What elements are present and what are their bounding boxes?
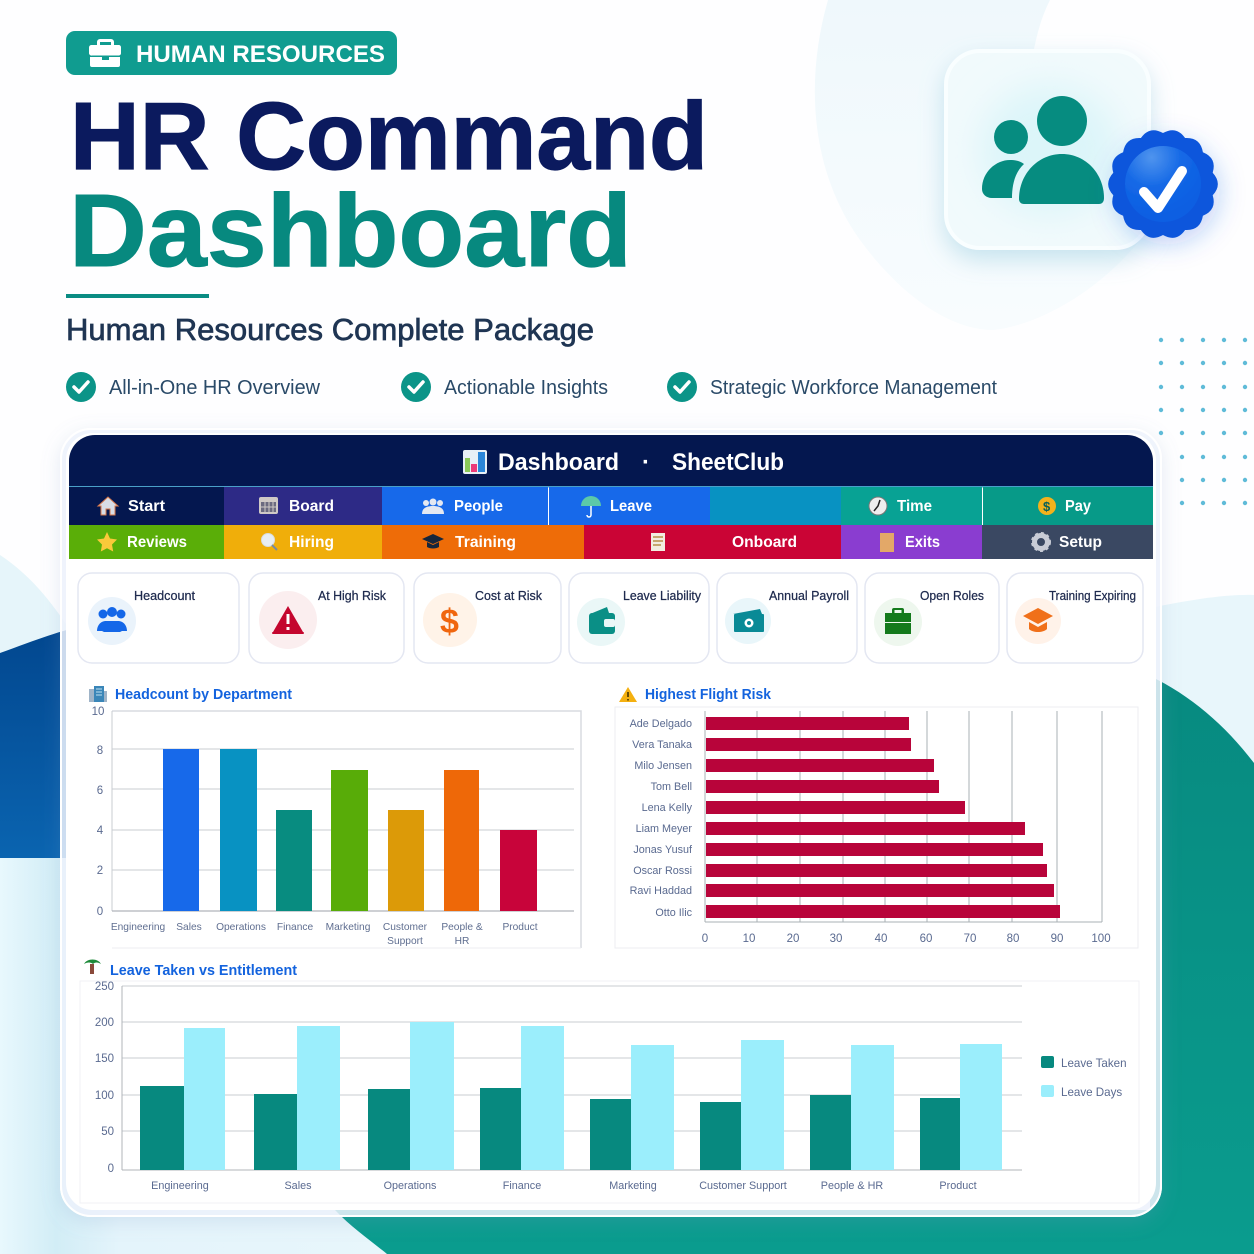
x axis labels: Marketing bbox=[326, 922, 371, 933]
tab: people bbox=[422, 498, 503, 515]
tab: start bbox=[98, 497, 166, 515]
card: headcount bbox=[78, 573, 239, 663]
chart heading: Headcount by Department bbox=[115, 687, 292, 703]
x axis labels: Support bbox=[387, 936, 423, 947]
x axis labels: Finance bbox=[277, 922, 313, 933]
badge: human resources bbox=[66, 31, 397, 75]
x axis labels: Engineering bbox=[111, 922, 166, 933]
y axis labels: 0 bbox=[108, 1163, 114, 1175]
dashboard header: · bbox=[642, 449, 650, 476]
tab: pay: $ bbox=[1043, 499, 1051, 514]
card: annual payroll: Annual Payroll bbox=[769, 589, 849, 603]
tab: onboard: Onboard bbox=[732, 534, 797, 551]
tab: setup: Setup bbox=[1059, 534, 1102, 551]
y axis labels: 6 bbox=[97, 785, 103, 797]
names: Lena Kelly bbox=[642, 802, 693, 814]
x axis labels: 40 bbox=[875, 933, 887, 945]
x axis labels bbox=[702, 933, 1111, 945]
x axis labels: Customer bbox=[383, 922, 428, 933]
legend: Leave Days bbox=[1061, 1086, 1122, 1099]
title: Dashboard bbox=[69, 173, 632, 288]
tab: reviews bbox=[97, 532, 187, 552]
card: open roles: Open Roles bbox=[920, 589, 984, 603]
dashboard header bbox=[69, 435, 1153, 486]
tab: start: Start bbox=[128, 498, 166, 515]
x axis labels: People & HR bbox=[821, 1180, 883, 1192]
KPI cards bbox=[78, 573, 1143, 663]
tab: leave bbox=[581, 496, 652, 517]
icon: verified badge bbox=[1108, 130, 1218, 238]
card: training expiring bbox=[1007, 573, 1143, 663]
y axis labels: 10 bbox=[92, 706, 104, 718]
dashboard header: SheetClub bbox=[672, 449, 784, 476]
x axis labels: Customer Support bbox=[699, 1180, 787, 1192]
tab: time bbox=[869, 497, 932, 515]
tab: exits bbox=[880, 533, 940, 552]
x axis labels: People & bbox=[441, 922, 483, 933]
x axis labels: 100 bbox=[1091, 933, 1111, 945]
x axis labels: Operations bbox=[216, 922, 266, 933]
tab: hiring: Hiring bbox=[289, 534, 334, 551]
tab: hiring bbox=[262, 534, 334, 551]
card: at high risk bbox=[249, 573, 404, 663]
x axis labels: 90 bbox=[1051, 933, 1063, 945]
tab: training bbox=[422, 534, 516, 551]
y axis labels: 150 bbox=[95, 1053, 114, 1065]
names: Otto Ilic bbox=[655, 907, 693, 919]
navigation row 2 bbox=[69, 525, 1153, 559]
names bbox=[630, 718, 693, 919]
tab: exits: Exits bbox=[905, 534, 940, 551]
x axis labels: 10 bbox=[743, 933, 755, 945]
feature: all-in-one bbox=[66, 372, 321, 402]
x axis labels: Product bbox=[502, 922, 538, 933]
x axis labels: Marketing bbox=[609, 1180, 657, 1192]
x axis labels: 30 bbox=[830, 933, 842, 945]
icon: glass card with people and badge bbox=[946, 51, 1218, 248]
card: leave liability bbox=[569, 573, 709, 663]
card: leave liability: Leave Liability bbox=[623, 589, 702, 603]
leave taken bars bbox=[140, 1086, 960, 1170]
feature list bbox=[66, 372, 997, 402]
chart: leave taken vs entitlement bbox=[80, 960, 1139, 1203]
navigation row 1 bbox=[69, 486, 1153, 525]
y axis labels bbox=[95, 981, 114, 1175]
tab: board: Board bbox=[289, 498, 334, 515]
x axis labels: Engineering bbox=[151, 1180, 209, 1192]
y axis labels: 0 bbox=[97, 906, 103, 918]
chart heading: Highest Flight Risk bbox=[645, 687, 772, 703]
x axis labels: Sales bbox=[284, 1180, 312, 1192]
x axis labels bbox=[111, 922, 538, 947]
card: cost at risk: $ bbox=[440, 603, 459, 641]
names: Oscar Rossi bbox=[633, 865, 692, 877]
icon: bar chart bbox=[463, 450, 487, 474]
tab: leave: Leave bbox=[610, 498, 652, 515]
x axis labels bbox=[151, 1180, 977, 1192]
y axis labels: 100 bbox=[95, 1090, 114, 1102]
chart heading: Leave Taken vs Entitlement bbox=[110, 963, 297, 979]
tab: board bbox=[259, 497, 334, 515]
y axis labels: 4 bbox=[97, 825, 104, 837]
card: open roles bbox=[865, 573, 999, 663]
feature: insights bbox=[401, 372, 608, 402]
x axis labels: 60 bbox=[920, 933, 932, 945]
card: cost at risk bbox=[414, 573, 561, 663]
card: annual payroll bbox=[717, 573, 857, 663]
x axis labels: 0 bbox=[702, 933, 708, 945]
tab: training: Training bbox=[455, 534, 516, 551]
y axis labels: 2 bbox=[97, 865, 103, 877]
card: cost at risk: Cost at Risk bbox=[475, 589, 543, 603]
feature: workforce: Strategic Workforce Management bbox=[710, 377, 997, 399]
x axis labels: HR bbox=[455, 936, 469, 947]
names: Ade Delgado bbox=[630, 718, 692, 730]
tab: reviews: Reviews bbox=[127, 534, 187, 551]
x axis labels: 70 bbox=[964, 933, 976, 945]
tab: time: Time bbox=[897, 498, 932, 515]
feature: all-in-one: All-in-One HR Overview bbox=[109, 377, 321, 399]
dashboard header: Dashboard bbox=[498, 449, 619, 476]
names: Milo Jensen bbox=[634, 760, 692, 772]
names: Vera Tanaka bbox=[632, 739, 692, 751]
bars bbox=[706, 717, 1060, 918]
icon: briefcase bbox=[89, 39, 121, 67]
y axis labels: 50 bbox=[101, 1126, 114, 1138]
names: Tom Bell bbox=[651, 781, 692, 793]
tab: pay bbox=[1038, 497, 1091, 515]
x axis labels: 80 bbox=[1007, 933, 1019, 945]
card: headcount: Headcount bbox=[134, 589, 196, 603]
badge: human resources: HUMAN RESOURCES bbox=[136, 41, 385, 68]
tab: setup bbox=[1032, 533, 1102, 551]
x axis labels: 20 bbox=[787, 933, 799, 945]
names: Liam Meyer bbox=[636, 823, 692, 835]
names: Ravi Haddad bbox=[630, 885, 692, 897]
chart: headcount by department bbox=[89, 686, 581, 948]
card: training expiring: Training Expiring bbox=[1049, 589, 1136, 603]
x axis labels: Finance bbox=[503, 1180, 541, 1192]
feature: workforce bbox=[667, 372, 997, 402]
y axis labels bbox=[92, 706, 104, 918]
y axis labels: 8 bbox=[97, 745, 103, 757]
decorative dots bbox=[1159, 338, 1247, 505]
leave days bars bbox=[184, 1022, 1002, 1170]
names: Jonas Yusuf bbox=[633, 844, 693, 856]
bars bbox=[163, 749, 537, 911]
title bbox=[69, 83, 708, 288]
panel: dashboard bbox=[61, 429, 1161, 1216]
tab: onboard bbox=[651, 533, 797, 551]
title: HR Command bbox=[70, 83, 708, 190]
x axis labels: Operations bbox=[384, 1180, 437, 1192]
y axis labels: 250 bbox=[95, 981, 114, 993]
subtitle: Human Resources Complete Package bbox=[66, 312, 594, 347]
tab: pay: Pay bbox=[1065, 498, 1091, 515]
card: at high risk: At High Risk bbox=[318, 589, 387, 603]
legend bbox=[1041, 1056, 1127, 1099]
legend: Leave Taken bbox=[1061, 1057, 1127, 1070]
x axis labels: Product bbox=[939, 1180, 977, 1192]
feature: insights: Actionable Insights bbox=[444, 377, 608, 399]
icon: people bbox=[982, 96, 1104, 204]
chart: highest flight risk bbox=[615, 687, 1138, 948]
tab: people: People bbox=[454, 498, 503, 515]
y axis labels: 200 bbox=[95, 1017, 114, 1029]
x axis labels: Sales bbox=[176, 922, 202, 933]
